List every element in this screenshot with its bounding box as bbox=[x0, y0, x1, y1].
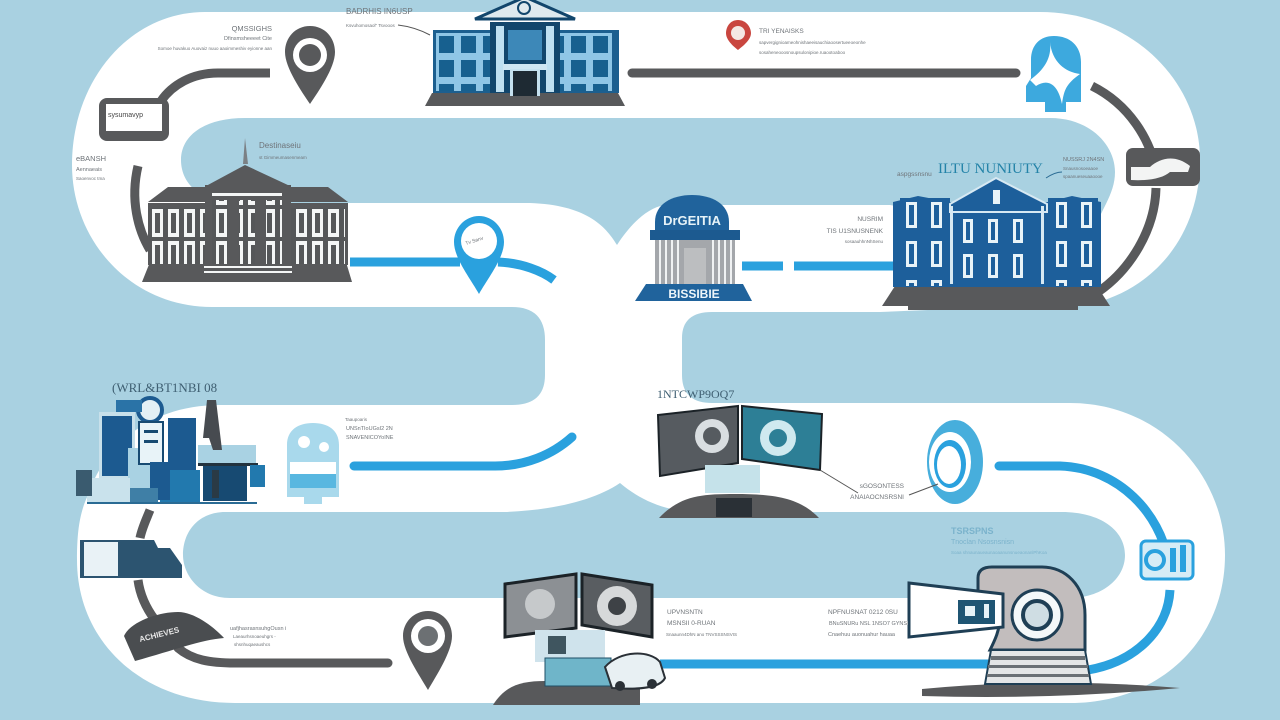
pin: blue: Tv Sanv bbox=[465, 235, 485, 247]
icon: blue badge bbox=[1141, 541, 1193, 579]
text block: top centre: BADRHIS IN6USP bbox=[346, 7, 413, 16]
text block: navy building right: spaanueseuaaoooe bbox=[1063, 174, 1103, 179]
text block: bottom right bbox=[828, 609, 909, 638]
text block: left building: st Gimmeumasenmeam bbox=[259, 155, 307, 160]
text block: top centre bbox=[346, 7, 430, 35]
text block: bottom left: uafjhasrasnsuhgOusn i bbox=[230, 626, 286, 632]
text block: left side: eBANSH bbox=[76, 154, 106, 163]
pin: blue bbox=[454, 216, 504, 294]
text block: navy building right bbox=[1046, 157, 1104, 179]
text block: third row left: Taaupoaris bbox=[345, 417, 368, 422]
icon: pale blue head bbox=[287, 423, 339, 504]
illustration: camera machine bbox=[909, 567, 1180, 697]
illustration: left machinery cluster bbox=[76, 398, 265, 504]
text block: left building bbox=[259, 141, 307, 160]
text block: monitors callout bbox=[850, 483, 938, 501]
text block: monitors callout: ANAIAOCNSRSNI bbox=[850, 494, 904, 501]
connector lines: gray top route bbox=[135, 73, 1156, 292]
icon: gray card right bbox=[1126, 148, 1200, 186]
text block: bottom right: BNuSNURu NSL 1NSO7 GYNSI bbox=[829, 621, 909, 627]
building: centre dome: DrGEITIA bbox=[663, 213, 721, 228]
icon: navy card bbox=[80, 540, 182, 578]
text block: top right: TRI YENAISKS bbox=[759, 28, 804, 35]
building: centre dome bbox=[635, 195, 752, 301]
text block: camera machine: Soaa shnaunaueaunaoaanunsnueaonanlPhKoa bbox=[951, 550, 1047, 555]
pin: red bbox=[726, 20, 751, 50]
text block: centre row two: TIS U1SNUSNENK bbox=[827, 228, 884, 235]
text block: third row left bbox=[345, 417, 394, 441]
icon: dark cap bbox=[124, 612, 224, 661]
text block: left building: Destinaseiu bbox=[259, 141, 301, 150]
text block: bottom centre: MSNSII 0-RUAN bbox=[667, 620, 716, 627]
illustration: monitors upper bbox=[658, 406, 858, 518]
icon: blue head bbox=[1026, 36, 1081, 112]
building: top centre blue bbox=[425, 0, 625, 106]
text block: third row left: SNAVENICOYoINE bbox=[346, 435, 394, 441]
heading: navy building: aspgssnsnu bbox=[897, 171, 932, 178]
icon: dark cap: ACHIEVES bbox=[138, 625, 181, 644]
text block: top left bbox=[158, 24, 272, 51]
building: left gray bbox=[142, 138, 352, 282]
text block: camera machine: Tnoclan Nsosnsnisn bbox=[951, 539, 1014, 546]
pin: gray top bbox=[285, 26, 335, 104]
text block: top left: QMSSIGHS bbox=[232, 24, 272, 33]
text block: bottom centre bbox=[666, 609, 737, 637]
text block: centre row two bbox=[827, 216, 884, 244]
text block: top right bbox=[759, 28, 866, 55]
icon: blue rings bbox=[927, 420, 983, 504]
pin: gray bottom bbox=[403, 611, 452, 690]
text block: bottom right: Cnaehuu auonuahur hauaa bbox=[828, 632, 896, 638]
text block: bottom centre: UPVNSNTN bbox=[667, 609, 703, 616]
text block: centre row two: sosaauhhnNhSenu bbox=[845, 239, 883, 244]
text block: monitors callout: sGOSONTESS bbox=[860, 483, 905, 490]
text block: left side bbox=[76, 154, 106, 181]
connector lines: blue second row bbox=[350, 262, 896, 280]
text block: top right: sosaheneooosnoupsulonipioe.ruaootoaboo bbox=[759, 50, 846, 55]
building: right navy bbox=[882, 178, 1110, 310]
connector lines: gray lower left route bbox=[138, 510, 388, 663]
building: centre dome: BISSIBIE bbox=[668, 287, 720, 301]
text block: bottom left: shsnhuqaeaushcs bbox=[234, 642, 271, 647]
text block: top left: Dfinsmsheeeet Cite bbox=[224, 36, 272, 42]
text block: bottom right: NPFNUSNAT 0212 0SU bbox=[828, 609, 898, 616]
text block: navy building right: Snausnosoeaaoe bbox=[1063, 166, 1099, 171]
text block: navy building right: NUSSRJ 2N4SN bbox=[1063, 157, 1104, 163]
heading: cluster: (WRL&BT1NBI 08 bbox=[112, 380, 217, 395]
text block: bottom left bbox=[230, 626, 286, 647]
connector lines: blue third row and right loop bbox=[354, 437, 1170, 670]
icon: gray card left: sysumavyp bbox=[108, 112, 143, 119]
text block: third row left: UNSnTIoUGsI2 2N bbox=[346, 426, 393, 432]
text block: monitors heading: 1NTCWP9OQ7 bbox=[657, 387, 734, 401]
heading: navy building bbox=[897, 161, 1043, 178]
text block: top centre: Ksvuhomosaol" Tsvooos bbox=[346, 23, 396, 28]
text block: centre row two: NUSRIM bbox=[857, 216, 883, 223]
text block: camera machine bbox=[951, 526, 1047, 555]
text block: bottom left: Laeaurhsnoaeuhgrs - bbox=[233, 634, 276, 639]
text block: bottom centre: Snaaunn4DhN ano TNVSSSNSVIS bbox=[666, 632, 737, 637]
text block: left side: Saoenvoc tma bbox=[76, 176, 105, 181]
illustration: monitors lower with vehicle bbox=[493, 574, 665, 705]
text block: top right: sapvergignioameohnishaeeisauchiaoosertueeoeonhe bbox=[759, 40, 866, 45]
text block: camera machine: TSRSPNS bbox=[951, 526, 994, 536]
icon: gray card left bbox=[99, 98, 169, 141]
text block: top left: Somoe huvakuo Auovaiz nuuo aaoimmeshiv eyionne aan bbox=[158, 46, 272, 51]
text block: left side: Aennaeais bbox=[76, 167, 102, 173]
heading: navy building: ILTU NUNIUTY bbox=[938, 161, 1043, 177]
